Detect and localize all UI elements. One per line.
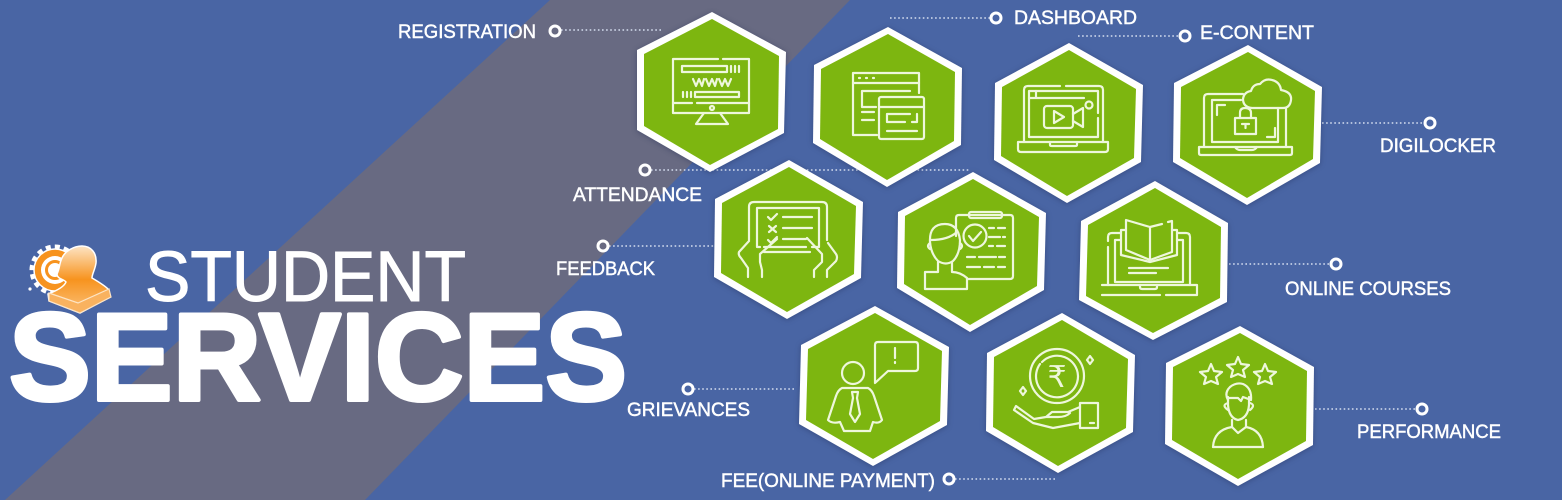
title [9, 238, 627, 427]
label: e-content: E-CONTENT [1200, 23, 1314, 44]
icon: laptop with video [1018, 86, 1108, 152]
heading: student: STUDENT [145, 238, 466, 317]
hexagon: feedback [714, 160, 863, 319]
hexagon: performance [1165, 326, 1314, 486]
diagonal band [5, 0, 850, 500]
hexagon: e-content [994, 43, 1143, 203]
label: dashboard [890, 8, 1137, 29]
label: registration: REGISTRATION [398, 22, 536, 43]
label: attendance: ATTENDANCE [573, 185, 702, 206]
hexagon: registration [637, 12, 786, 172]
heading: services: SERVICES [9, 289, 627, 427]
label: performance: PERFORMANCE [1357, 422, 1501, 443]
label: dashboard: DASHBOARD [1014, 8, 1137, 29]
label: fee online payment: FEE(ONLINE PAYMENT) [721, 471, 935, 492]
icon: person with clipboard [925, 212, 1013, 289]
label: fee online payment [721, 471, 1055, 492]
hexagon: grievances [799, 306, 949, 466]
icon: laptop with cloud and lock [1199, 80, 1292, 155]
label: digilocker: DIGILOCKER [1380, 136, 1496, 157]
label: grievances [627, 384, 795, 421]
hexagon: fee online payment [986, 313, 1135, 473]
label: attendance [573, 165, 970, 206]
icon: rupee coin over hand [1014, 349, 1098, 428]
label: grievances: GRIEVANCES [627, 400, 750, 421]
hexagon: online courses [1079, 181, 1228, 340]
label: digilocker [1322, 118, 1496, 157]
icon: person with three stars [1200, 357, 1276, 447]
icon: monitor with www [673, 59, 749, 124]
label: e-content [1078, 23, 1314, 44]
icon: browser windows [853, 73, 924, 139]
hexagon: attendance checklist [897, 172, 1046, 332]
label: feedback: FEEDBACK [556, 259, 655, 280]
icon: hands holding tablet checklist [739, 202, 837, 277]
icon: person with speech bubble [828, 342, 918, 431]
label: online courses [1229, 259, 1451, 300]
hexagon: digilocker [1173, 45, 1322, 205]
label: feedback [556, 241, 714, 280]
label: performance [1315, 404, 1501, 443]
label: registration [398, 22, 662, 43]
label: online courses: ONLINE COURSES [1285, 279, 1451, 300]
hexagon: dashboard [813, 27, 962, 187]
logo icon: student with gear and book [28, 246, 111, 313]
icon: rupee coin over hand: ₹ [1047, 360, 1067, 395]
icon: laptop with open book [1102, 220, 1197, 295]
